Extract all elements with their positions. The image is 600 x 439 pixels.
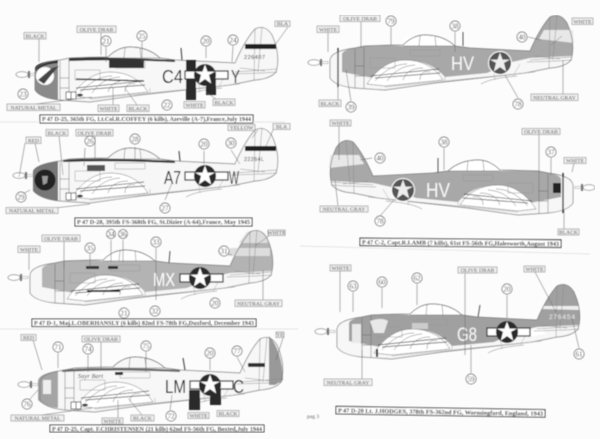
label: olive drab — [340, 15, 380, 22]
aircraft 6: P-47 C-2 HV mirrored — [329, 126, 595, 229]
callout numbers: 20 — [504, 286, 511, 294]
label: black: BLACK — [215, 100, 233, 106]
label: yellow: YELLOW — [230, 126, 254, 132]
label: white: WHITE — [189, 414, 208, 420]
callout numbers: 40 — [518, 34, 526, 42]
callout numbers: 24 — [230, 36, 237, 44]
caption: aircraft 1: P 47 D-25, 365th FG, Lt.Col.R.COFFEY (6 kills), Azeville (A-7),France,July 1944 — [42, 116, 251, 123]
aircraft 3: P-47 D-1 MX: MX — [153, 270, 175, 290]
aircraft 7: P-47 D-20 G8-Z: G8 — [457, 325, 477, 346]
label: black: BLACK — [26, 34, 44, 40]
label: black cropped: BLA — [276, 124, 287, 130]
callout numbers: 63 — [350, 282, 357, 290]
aircraft 4: P-47 D-25 LM-C: C — [233, 377, 244, 397]
label: white: WHITE — [331, 266, 350, 272]
label: natural metal: NATURAL METAL — [10, 105, 57, 111]
label: black: BLACK — [48, 131, 66, 137]
label: olive drab: OLIVE DRAB — [78, 131, 112, 137]
aircraft 1: P-47 D-25 C4-Y: 226407 — [244, 55, 265, 61]
callout numbers: 75 — [142, 342, 150, 350]
callout numbers: 23 — [20, 90, 27, 98]
label: olive drab: OLIVE DRAB — [84, 337, 118, 343]
callout numbers: 33 — [152, 238, 160, 246]
callout numbers: 38 — [440, 138, 448, 146]
label: neutral gray: NEUTRAL GRAY — [533, 95, 576, 101]
aircraft 1: P-47 D-25 C4-Y — [16, 27, 288, 105]
label: black cropped — [273, 124, 290, 130]
label: red: RED — [28, 138, 39, 144]
caption: aircraft 3: P 47 D-1, Maj.L.OBERHANSLY (6 kills) 82nd FS-78th FG,Duxford, December 1943 — [34, 320, 254, 327]
label: black: BLACK — [129, 106, 147, 112]
callout numbers: 22 — [164, 102, 171, 110]
callout numbers: 78 — [514, 100, 522, 108]
caption: aircraft 4: P 47 D-25, Capt. F.CHRISTENSEN (21 kills) 62nd FS-56th FG, Boxted,July 1944 — [52, 426, 262, 433]
label: white — [317, 26, 339, 33]
aircraft 4: P-47 D-25 LM-C: LM — [165, 377, 186, 397]
label: olive drab: OLIVE DRAB — [524, 130, 558, 136]
callout numbers: 78 — [376, 218, 384, 226]
label: red — [26, 137, 41, 144]
callout numbers: 72 — [168, 412, 175, 420]
aircraft 2: P-47 D-28 A7-W — [13, 128, 278, 211]
callout numbers: 62 — [414, 274, 421, 282]
callout numbers: 76 — [24, 400, 31, 408]
aircraft 3: P-47 D-1 MX — [8, 230, 273, 305]
callout numbers: 79 — [388, 18, 395, 26]
aircraft 6: P-47 C-2 HV mirrored: HV — [426, 180, 451, 202]
label: white: WHITE — [103, 419, 122, 425]
label: white: WHITE — [319, 27, 338, 33]
callout numbers: 38 — [452, 22, 459, 30]
aircraft 5: P-47 C-2 HV top: HV — [451, 54, 474, 75]
callout numbers: 59 — [468, 376, 475, 384]
label: white: WHITE — [185, 103, 204, 109]
aircraft 2: P-47 D-28 A7-W: A7 — [164, 168, 181, 188]
aircraft 1: P-47 D-25 C4-Y: C4 — [162, 67, 183, 87]
label: white: WHITE — [331, 121, 350, 127]
label: black: BLACK — [321, 101, 339, 107]
label: black cropped — [275, 21, 290, 28]
label: white: WHITE — [267, 230, 286, 236]
label: black: BLACK — [219, 412, 237, 418]
label: white: WHITE — [99, 106, 118, 112]
labels: right column — [317, 15, 593, 386]
label: neutral gray: NEUTRAL GRAY — [323, 207, 365, 213]
label: olive drab: OLIVE DRAB — [44, 236, 78, 242]
callout numbers: 21 — [120, 310, 128, 318]
callout numbers: 26 — [86, 138, 94, 146]
callout numbers: 71 — [54, 344, 62, 352]
callout numbers: 30 — [228, 140, 235, 148]
page number: pag 3 — [307, 414, 319, 420]
callout numbers: 32 — [152, 308, 159, 316]
callout numbers: 29 — [18, 194, 25, 202]
callout numbers: 39 — [348, 104, 355, 112]
callout numbers: 20 — [202, 38, 210, 46]
label: olive drab: OLIVE DRAB — [80, 27, 114, 33]
callout numbers: 20 — [206, 350, 214, 358]
callout numbers: 36 — [120, 230, 127, 238]
aircraft 4: P-47 D-25 LM-C — [18, 336, 283, 418]
label: yellow cropped: YE — [276, 332, 284, 338]
label: olive drab: OLIVE DRAB — [461, 268, 495, 274]
label: red: RED — [23, 336, 34, 342]
callout numbers: 77 — [234, 348, 241, 356]
label: red — [21, 334, 36, 342]
callout numbers: 35 — [86, 244, 94, 252]
callout numbers: 20 — [200, 140, 208, 148]
callout numbers: 20 — [212, 300, 219, 308]
labels: left column — [6, 21, 290, 425]
label: natural metal: NATURAL METAL — [9, 208, 56, 214]
callout numbers: 31 — [220, 248, 228, 256]
label: neutral gray: NEUTRAL GRAY — [237, 301, 280, 307]
label: white — [18, 246, 40, 253]
callout numbers: 34 — [108, 230, 115, 238]
callout numbers: 60 — [378, 278, 386, 286]
caption: aircraft 2: P 47 D-28, 395th FS-368th FG, St.Dizier (A-64),France, May 1945 — [77, 219, 250, 226]
callout numbers: 28 — [132, 136, 139, 144]
aircraft 2: P-47 D-28 A7-W: W — [229, 168, 239, 188]
label: black: BLACK — [133, 416, 152, 422]
label: black cropped: BLA — [277, 22, 288, 28]
caption: aircraft 5 and 6: P 47 C-2, Capt.R.LAMB (7 kills), 61st FS-56th FG,Halesworth,August 1943 — [362, 239, 559, 248]
label: olive drab: OLIVE DRAB — [343, 16, 377, 22]
callout numbers: 21 — [102, 38, 110, 46]
label: black: BLACK — [559, 230, 578, 236]
label: white: WHITE — [525, 267, 544, 273]
label: natural metal: NATURAL METAL — [14, 416, 61, 422]
label: white: WHITE — [566, 158, 585, 164]
callout numbers: 61 — [576, 350, 583, 358]
label: white: WHITE — [573, 19, 592, 25]
callout numbers: 40 — [376, 154, 384, 162]
aircraft 7: P-47 D-20 G8-Z — [315, 271, 580, 379]
callout numbers: 27 — [162, 204, 169, 212]
caption: aircraft 7: P 47 D-20 Lt. J.HODGES, 378th FS-362nd FG, Wormingford, England, 1943 — [338, 408, 543, 418]
aircraft 2: P-47 D-28 A7-W: 22264L — [244, 157, 264, 163]
callout numbers: 74 — [84, 346, 92, 354]
callout numbers: 37 — [548, 148, 555, 156]
aircraft 7: P-47 D-20 G8-Z: 276454 — [549, 314, 575, 321]
aircraft 4: P-47 D-25 LM-C: Sayr Bart — [78, 374, 103, 380]
aircraft 5: P-47 C-2 HV top — [308, 15, 574, 101]
label: neutral gray: NEUTRAL GRAY — [327, 380, 369, 386]
aircraft 1: P-47 D-25 C4-Y: Y — [231, 67, 240, 87]
label: white: WHITE — [20, 247, 39, 253]
callout numbers: 25 — [138, 32, 146, 40]
